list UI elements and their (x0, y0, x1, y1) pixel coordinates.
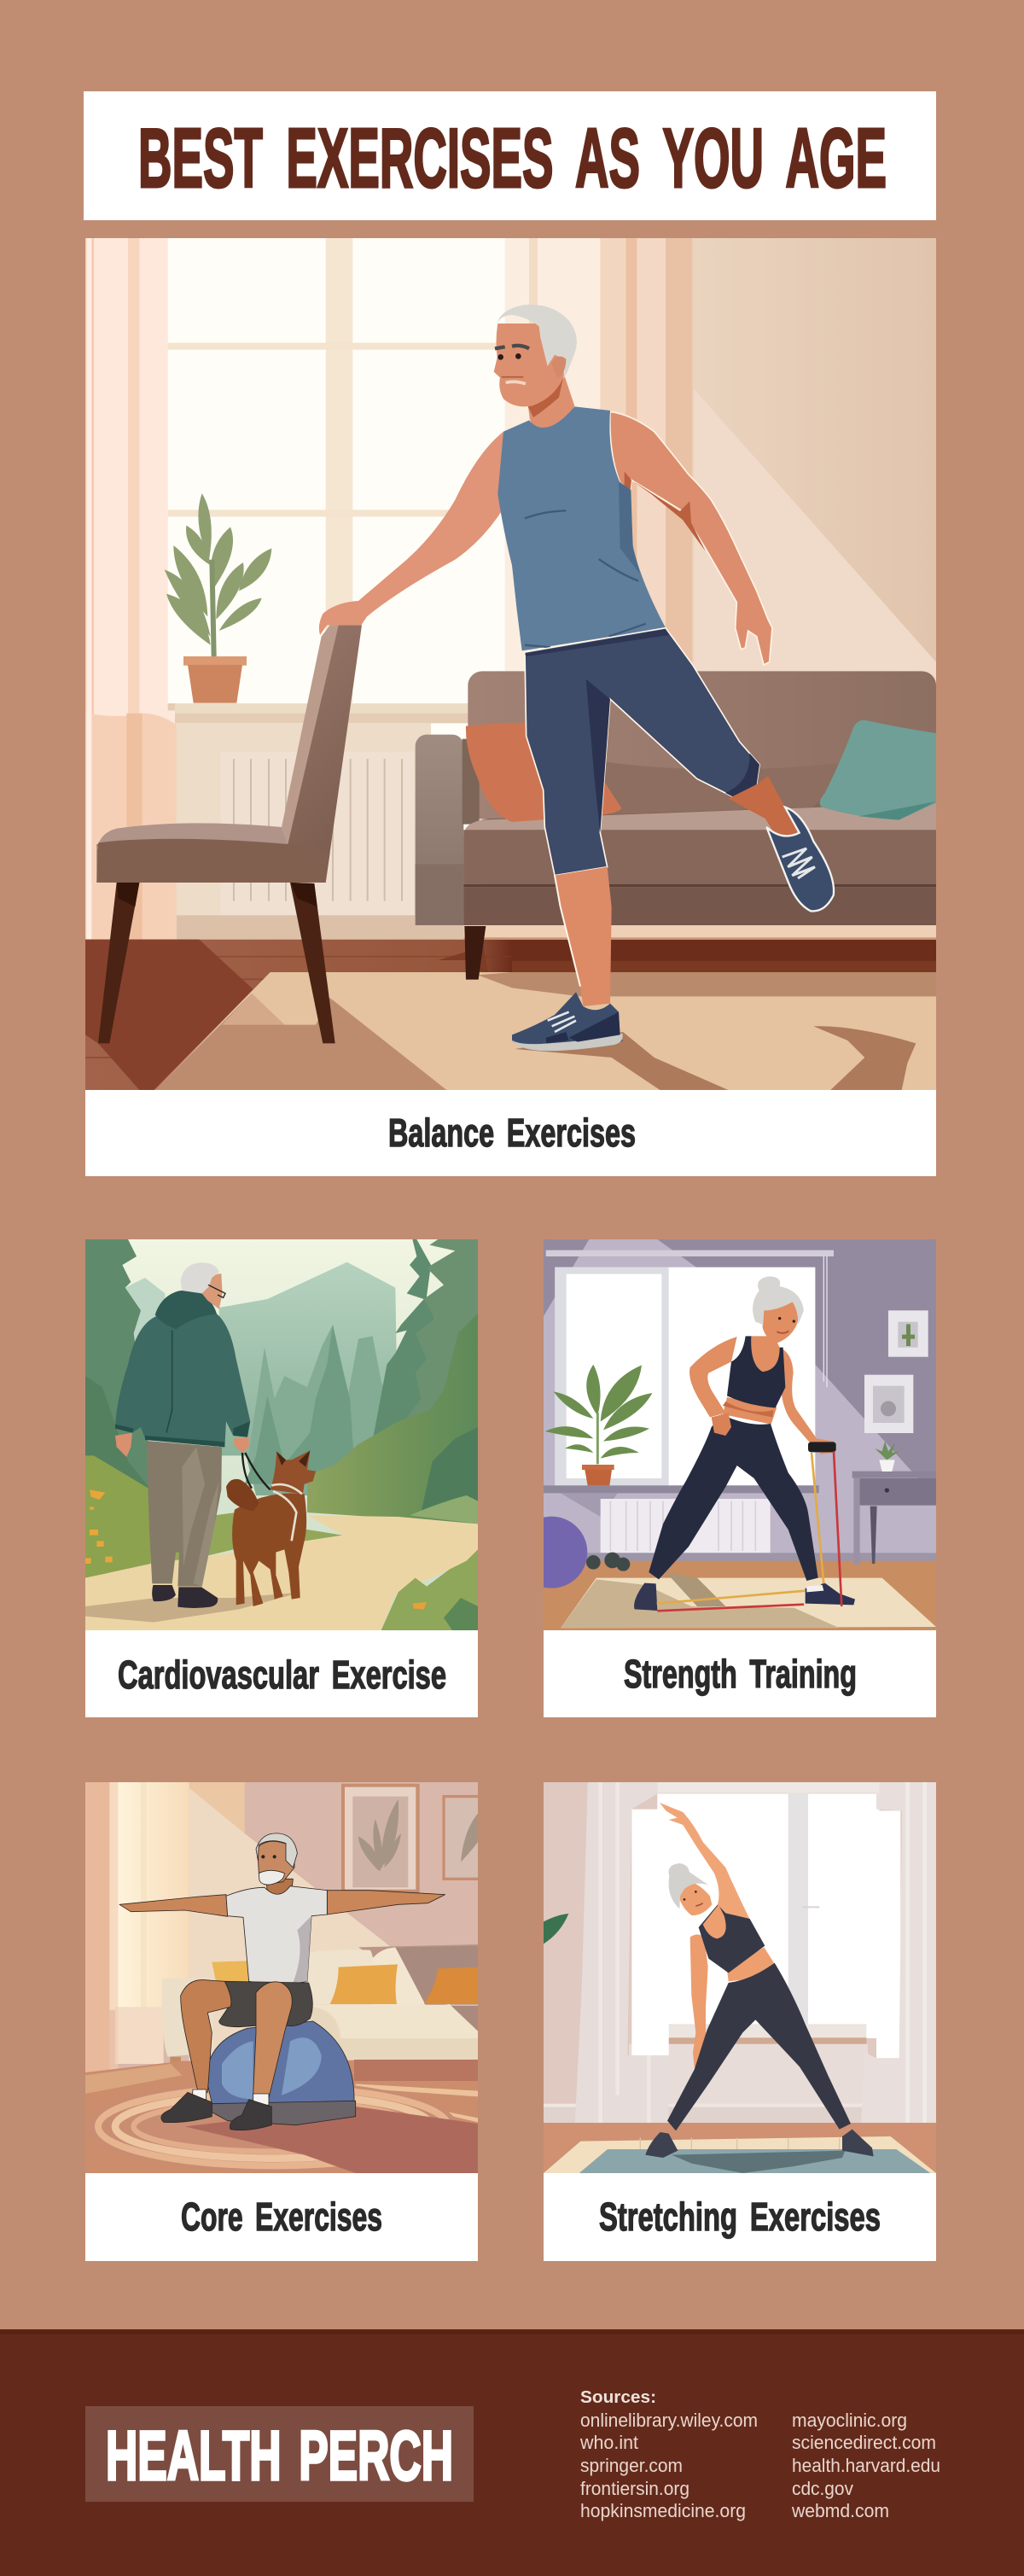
handle (808, 1442, 836, 1452)
dog (226, 1450, 316, 1606)
chest and neck (751, 1336, 780, 1372)
tank top (497, 406, 666, 650)
woman (634, 1276, 855, 1611)
chair (96, 625, 362, 1043)
illustration: older woman with resistance band (544, 1239, 936, 1630)
illustration: older woman doing a side stretch (544, 1782, 936, 2173)
raised shoe (766, 807, 834, 911)
floor (85, 2060, 478, 2173)
shorts (219, 1981, 312, 2027)
room (544, 1239, 936, 1630)
room (85, 1782, 478, 2173)
pillow: orange (466, 723, 621, 822)
socks and shoes (192, 2089, 269, 2105)
leggings (667, 1963, 851, 2130)
arms (689, 1337, 737, 1417)
midriff (727, 1947, 774, 1981)
raised arm (660, 1803, 750, 1920)
caption bar: Balance Exercises (388, 1110, 636, 1155)
curtains (575, 1782, 936, 2126)
illustration: older man on a balance ball with arms outstretched (85, 1782, 478, 2173)
wall frames (864, 1310, 928, 1433)
caption bar (544, 1630, 936, 1717)
foreground shrub (381, 1549, 478, 1630)
sources list: health.harvard.edu (792, 2455, 940, 2476)
woman (645, 1803, 874, 2158)
hand fist (712, 1413, 731, 1436)
leaf at left edge (544, 1914, 568, 1944)
caption bar (85, 1090, 936, 1176)
sources list: springer.com (580, 2455, 683, 2476)
panel: cardiovascular exercise (85, 1239, 478, 1717)
dirt path (85, 1515, 478, 1630)
sources list: onlinelibrary.wiley.com (580, 2410, 758, 2431)
sources list: cdc.gov (792, 2478, 853, 2499)
leggings (649, 1414, 818, 1581)
wall frames (341, 1784, 478, 1893)
standing calf (555, 867, 612, 1006)
sofa (162, 1946, 478, 2072)
resistance bands (657, 1451, 841, 1611)
sports bra (727, 1336, 785, 1407)
lower arm (690, 1934, 708, 2072)
footer (0, 2329, 1024, 2576)
man from behind (115, 1262, 250, 1608)
floor (85, 940, 936, 1090)
caption bar (85, 2173, 478, 2261)
arm held out (610, 411, 772, 665)
neck (266, 1879, 293, 1897)
shoes (634, 1583, 657, 1611)
shoes (645, 2132, 678, 2158)
standing shoe (512, 992, 623, 1051)
panel: stretching exercises (544, 1782, 936, 2261)
caption bar (85, 1630, 478, 1717)
shorts (525, 628, 759, 876)
pillow: teal (820, 720, 936, 820)
side table with succulent (852, 1442, 936, 1565)
midriff (723, 1397, 777, 1425)
round rug (88, 2081, 478, 2173)
head (678, 1881, 712, 1915)
sources list: Sources: (580, 2388, 656, 2407)
ball (207, 2021, 354, 2104)
bush with orange flowers (85, 1455, 343, 1578)
arms (119, 1895, 228, 1916)
left leg (181, 1980, 231, 2092)
forest background (85, 1239, 478, 1630)
dumbbells (586, 1553, 630, 1571)
panel: balance exercises (85, 238, 936, 1176)
raised calf (728, 776, 800, 842)
shirt (226, 1886, 327, 1984)
man on ball (119, 1833, 445, 2130)
sports bra (699, 1904, 765, 1973)
sources list: frontiersin.org (580, 2478, 689, 2499)
panel: core exercises (85, 1782, 478, 2261)
sources list: hopkinsmedicine.org (580, 2500, 746, 2521)
exercise ball (515, 1517, 587, 1588)
jacket (115, 1291, 250, 1447)
potted plant (165, 493, 271, 703)
caption bar (544, 2173, 936, 2261)
panel: strength training (544, 1239, 936, 1717)
left curtain (85, 238, 177, 941)
illustration: man balancing beside a chair in a living room (85, 238, 936, 1090)
caption bar: Core Exercises (181, 2194, 382, 2239)
head (494, 323, 566, 406)
head (258, 1841, 294, 1885)
shadows on path (85, 1592, 301, 1623)
sources list: who.int (579, 2432, 638, 2453)
sources list (579, 2388, 940, 2521)
floor and rug (544, 2123, 936, 2173)
sources list: webmd.com (791, 2500, 889, 2521)
head (763, 1299, 799, 1343)
man figure (319, 305, 834, 1051)
rug with shadows (155, 972, 936, 1090)
potted plant (545, 1365, 652, 1485)
sources list: sciencedirect.com (792, 2432, 936, 2453)
head (202, 1273, 223, 1309)
illustration: older man walking a dog on a forest path (85, 1239, 478, 1630)
rug (561, 1572, 936, 1628)
sources list: mayoclinic.org (792, 2410, 907, 2431)
neck (527, 372, 574, 434)
window and wall (85, 238, 936, 1090)
pillows (212, 1961, 478, 2004)
leash (242, 1453, 271, 1489)
arm resting on chair (319, 432, 503, 635)
sofa (416, 671, 936, 980)
right leg (253, 1982, 292, 2098)
title banner (84, 91, 936, 220)
room (544, 1782, 936, 2173)
